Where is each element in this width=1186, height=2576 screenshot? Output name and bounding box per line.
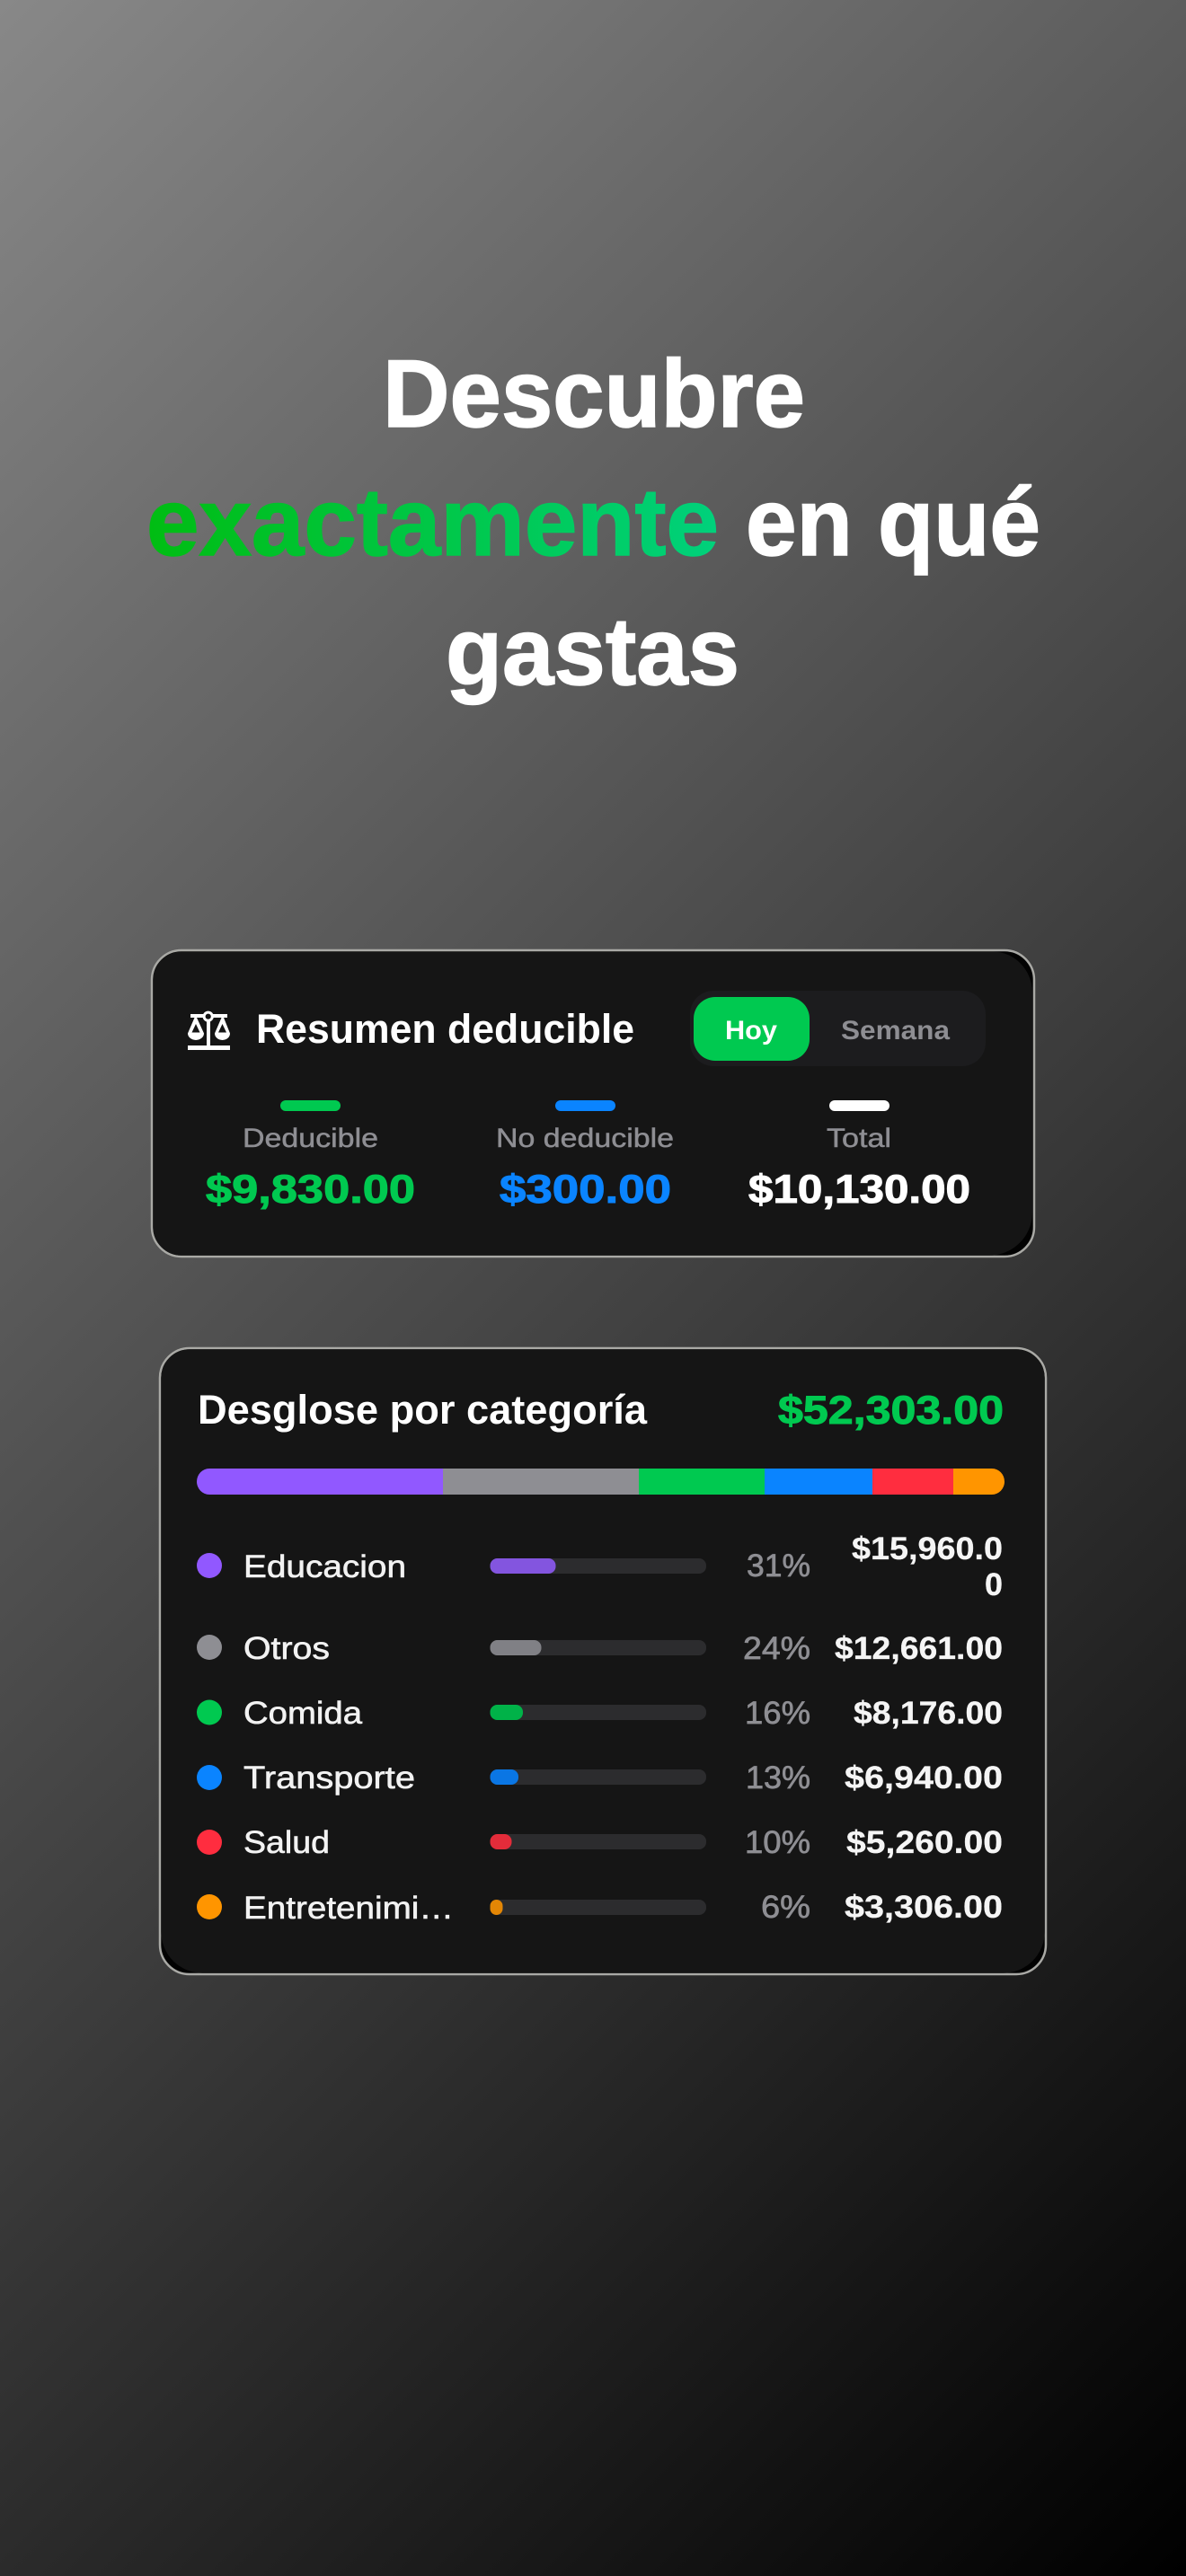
row: entretenimiento: Entretenimi…: [243, 1891, 454, 1926]
row: salud: 10%: [745, 1825, 810, 1860]
row: salud: $5,260.00: [846, 1825, 1003, 1860]
metric: no deducible: $300.00: [500, 1168, 671, 1212]
title: Descubre: [383, 340, 805, 447]
row: otros: 24%: [743, 1631, 810, 1666]
title: gastas: [446, 597, 739, 705]
row: salud: [197, 1825, 1003, 1860]
heading: resumen deducible: Resumen deducible: [256, 1006, 634, 1052]
row: educacion: [197, 1531, 1003, 1602]
toggle: hoy / semana: Hoy: [725, 1016, 777, 1045]
title: en qué: [746, 468, 1040, 576]
card frame: [152, 950, 1034, 1257]
toggle: hoy / semana: Semana: [841, 1016, 950, 1045]
row: transporte: [197, 1760, 1003, 1795]
row: comida: [197, 1696, 1003, 1731]
row: otros: Otros: [243, 1631, 330, 1666]
row: entretenimiento: $3,306.00: [845, 1890, 1003, 1925]
icon: balance scale: [188, 1012, 230, 1050]
metric: no deducible: No deducible: [496, 1124, 674, 1153]
row: educacion: $15,960.0: [852, 1531, 1003, 1566]
row: transporte: 13%: [746, 1760, 810, 1795]
card surface: [161, 1349, 1045, 1973]
row: otros: [197, 1631, 1003, 1666]
row: entretenimiento: 6%: [761, 1890, 810, 1925]
card frame: [160, 1348, 1046, 1974]
row: comida: Comida: [243, 1696, 363, 1731]
title: [146, 340, 1040, 705]
toggle: hoy / semana: [690, 991, 986, 1066]
metric: total: [748, 1100, 970, 1212]
row: otros: $12,661.00: [835, 1631, 1003, 1666]
metric: deducible: Deducible: [243, 1124, 378, 1153]
card surface: [153, 952, 1032, 1256]
panel: desglose por categoria: [160, 1348, 1046, 1974]
row: comida: $8,176.00: [854, 1696, 1003, 1731]
metric: total: Total: [827, 1124, 891, 1153]
row: educacion: Educacion: [243, 1549, 406, 1584]
row: entretenimiento: [197, 1890, 1003, 1926]
title: exactamente: [146, 468, 719, 576]
row: transporte: $6,940.00: [845, 1760, 1003, 1795]
heading: desglose por categoria: Desglose por categoría: [198, 1387, 648, 1433]
row: transporte: Transporte: [243, 1760, 415, 1795]
row: educacion: 0: [985, 1567, 1003, 1602]
total amount: $52,303.00: [778, 1389, 1004, 1433]
panel: resumen deducible: [152, 950, 1034, 1257]
metric: deducible: [206, 1100, 415, 1212]
row: educacion: 31%: [747, 1548, 810, 1584]
stacked bar: [197, 1469, 1005, 1495]
metric: deducible: $9,830.00: [206, 1168, 415, 1212]
row: salud: Salud: [243, 1825, 330, 1860]
metric: no deducible: [496, 1100, 674, 1212]
row: comida: 16%: [745, 1696, 810, 1731]
metric: total: $10,130.00: [748, 1168, 970, 1212]
